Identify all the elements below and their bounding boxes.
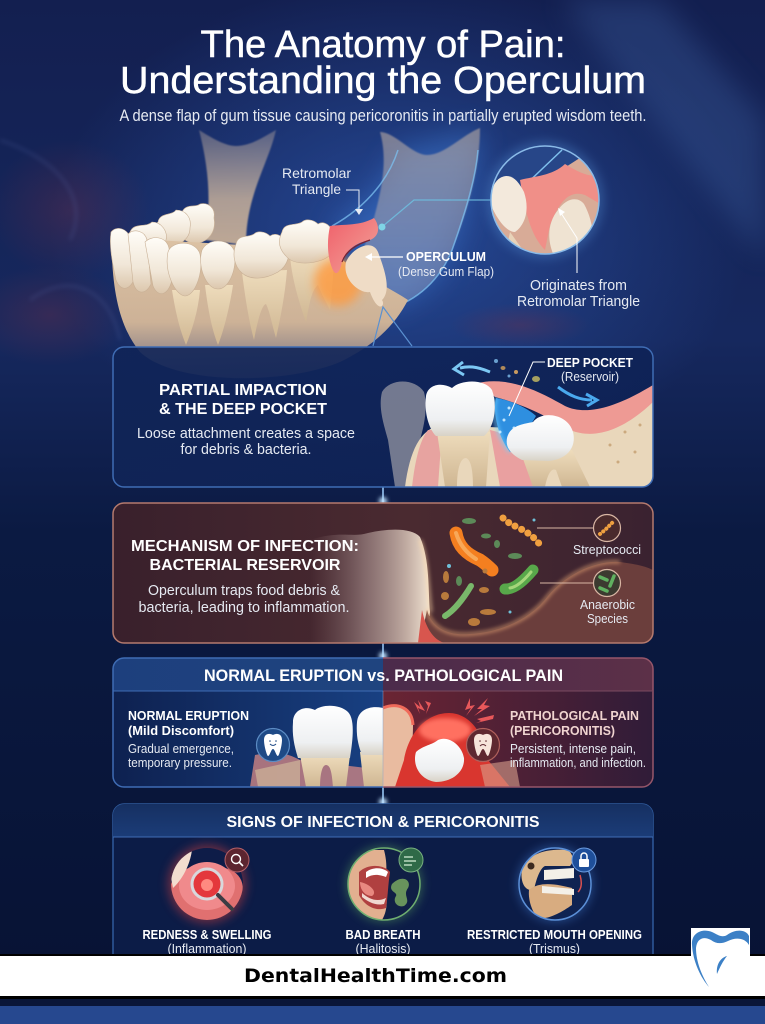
- panel header: NORMAL ERUPTION vs. PATHOLOGICAL PAIN: [204, 667, 563, 685]
- title: Understanding the Operculum: [120, 60, 646, 102]
- legend: streptococci: Streptococci: [573, 543, 641, 557]
- panel header: [113, 658, 653, 691]
- arrow: left: [454, 362, 490, 375]
- footer website text: DentalHealthTime.com: [244, 965, 507, 987]
- pain bolts: [414, 698, 494, 723]
- icon: jaw with lock: [517, 846, 596, 922]
- right text: pathological pain: [510, 708, 646, 770]
- sign: restricted mouth opening: [467, 846, 642, 956]
- sign caption: (Inflammation): [168, 942, 246, 956]
- connector to magnified circle: [383, 200, 490, 226]
- tooth and gum illustration: [310, 530, 653, 643]
- sign caption: BAD BREATH: [346, 928, 420, 942]
- sign caption: [346, 928, 420, 956]
- sign: bad breath: [345, 846, 423, 956]
- label: retromolar triangle: [282, 165, 363, 215]
- panel heading: [131, 538, 359, 574]
- bacteria cluster: [441, 518, 542, 626]
- label: operculum: (Dense Gum Flap): [398, 264, 494, 279]
- left text: normal eruption: temporary pressure.: [128, 755, 232, 770]
- panel header: [113, 804, 653, 837]
- deep pocket label: [509, 356, 633, 416]
- icon: happy tooth: [256, 728, 290, 762]
- sign caption: RESTRICTED MOUTH OPENING: [467, 928, 642, 942]
- panel description: Operculum traps food debris &: [148, 583, 340, 599]
- rear teeth: [128, 204, 214, 252]
- panel description: [138, 583, 350, 616]
- sign caption: (Trismus): [529, 942, 580, 956]
- panel: mechanism of infection: [113, 503, 653, 643]
- title: [120, 24, 646, 102]
- panel border: [113, 347, 653, 487]
- comparison illustration: [250, 706, 520, 787]
- panel heading: & THE DEEP POCKET: [159, 401, 327, 418]
- panel heading: MECHANISM OF INFECTION:: [131, 538, 359, 555]
- blue glow behind ramus: [332, 128, 480, 310]
- label: operculum: OPERCULUM: [406, 250, 486, 264]
- jaw illustration: [110, 128, 480, 378]
- left text: normal eruption: [128, 708, 249, 770]
- right text: pathological pain: PATHOLOGICAL PAIN: [510, 708, 639, 723]
- left text: normal eruption: (Mild Discomfort): [128, 723, 234, 738]
- subtitle: A dense flap of gum tissue causing pericoronitis in partially erupted wisdom teeth.: [120, 107, 646, 125]
- left half background: [113, 691, 383, 787]
- roots: [172, 253, 334, 345]
- legend: anaerobic species: Anaerobic: [580, 598, 635, 612]
- wisdom tooth: [345, 245, 387, 306]
- right text: pathological pain: inflammation, and infection.: [510, 755, 646, 770]
- label: retromolar triangle: Triangle: [292, 181, 341, 197]
- legend: anaerobic species: Species: [587, 612, 628, 626]
- left text: normal eruption: Gradual emergence,: [128, 741, 234, 756]
- connector dot: [378, 224, 386, 230]
- footer band: [0, 954, 765, 1024]
- deep pocket label: (Reservoir): [561, 370, 619, 384]
- panel: partial impaction and the deep pocket: [113, 347, 653, 487]
- panel description: Loose attachment creates a space: [137, 426, 355, 442]
- label: operculum: [365, 250, 494, 279]
- magnified inset circle: [486, 141, 610, 260]
- pointer from jaw to panel: [373, 307, 412, 346]
- panel heading: BACTERIAL RESERVOIR: [150, 557, 341, 574]
- panel border: [113, 503, 653, 643]
- left ramus of jaw: [199, 130, 276, 245]
- icon: mouth with green breath: [345, 846, 423, 925]
- icon: swollen gum with magnifier: [168, 845, 249, 925]
- connector lines between panels: [379, 487, 387, 806]
- legend: streptococci: [537, 514, 641, 557]
- debris particles: [494, 359, 540, 382]
- panel description: for debris & bacteria.: [180, 442, 312, 458]
- panel heading: [159, 382, 327, 418]
- deep pocket label: DEEP POCKET: [547, 356, 633, 370]
- icon: sad tooth: [466, 728, 500, 762]
- title: The Anatomy of Pain:: [200, 24, 566, 66]
- operculum glow: [314, 258, 362, 306]
- dental cross-section illustration: [381, 381, 653, 487]
- logo: tooth: [691, 928, 750, 987]
- sign caption: (Halitosis): [356, 942, 410, 956]
- panel heading: PARTIAL IMPACTION: [159, 382, 327, 399]
- label: retromolar triangle: Retromolar: [282, 165, 351, 181]
- label: originates from retromolar triangle: Originates from: [530, 277, 627, 294]
- jaw body: [112, 238, 408, 378]
- panel border: [113, 658, 653, 787]
- sign: redness and swelling: [142, 845, 272, 956]
- panel: signs of infection and pericoronitis: [112, 803, 654, 954]
- panel description: [137, 426, 355, 458]
- right text: pathological pain: (PERICORONITIS): [510, 723, 615, 738]
- blue glow edge: [332, 150, 478, 310]
- left text: normal eruption: NORMAL ERUPTION: [128, 708, 249, 723]
- right ramus of jaw: [345, 128, 480, 310]
- legend: anaerobic species: [540, 570, 635, 626]
- right half background: [383, 691, 653, 787]
- panel: normal eruption vs pathological pain: [113, 658, 653, 787]
- sign caption: REDNESS & SWELLING: [142, 928, 272, 942]
- panel description: bacteria, leading to inflammation.: [138, 600, 350, 616]
- operculum flap: [328, 218, 378, 273]
- front teeth: [110, 220, 335, 296]
- right text: pathological pain: Persistent, intense pain,: [510, 741, 636, 756]
- label: originates from retromolar triangle: Retromolar Triangle: [517, 293, 640, 310]
- label: originates from retromolar triangle: [517, 208, 640, 310]
- sign caption: [142, 928, 272, 956]
- sign caption: [467, 928, 642, 956]
- arrow: right: [558, 387, 597, 406]
- panel header: SIGNS OF INFECTION & PERICORONITIS: [226, 814, 540, 831]
